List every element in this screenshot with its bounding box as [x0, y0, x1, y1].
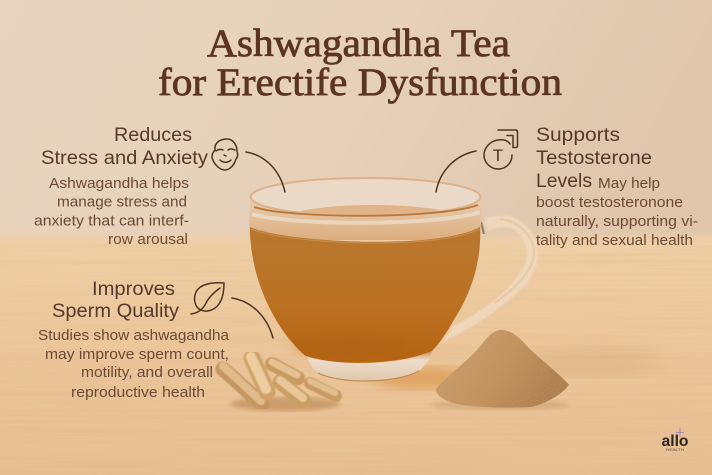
- shadows under cup and powder: [375, 348, 660, 410]
- connector arrow: [436, 151, 476, 192]
- icon: testosterone T symbol: [484, 130, 518, 169]
- connector arrow: [246, 152, 285, 192]
- body text: tality and sexual health: [536, 232, 693, 249]
- body text: may improve sperm count,: [45, 346, 229, 363]
- heading: Levels: [536, 171, 592, 192]
- rim interior: [252, 178, 478, 216]
- heading: Sperm Quality: [52, 301, 180, 322]
- logo: allo health: allo: [662, 433, 689, 450]
- glass rim: [250, 178, 480, 216]
- heading: [536, 125, 652, 192]
- callout: supports testosterone levels: [436, 125, 698, 249]
- heading: [41, 125, 209, 169]
- body text: May help: [598, 175, 660, 192]
- callout: improves sperm quality: [38, 279, 273, 401]
- heading: Stress and Anxiety: [41, 148, 209, 169]
- body text: [34, 175, 189, 248]
- icon: leaf: [191, 283, 224, 314]
- tea back surface through rim: [296, 205, 440, 216]
- callout: reduces stress and anxiety: [34, 125, 285, 248]
- cup foot: [306, 351, 432, 381]
- tea top band highlight: [251, 229, 479, 243]
- cup handle: [443, 216, 538, 342]
- body text: motility, and overall: [81, 364, 213, 381]
- connector arrow: [232, 298, 273, 338]
- body text: Ashwagandha helps: [49, 175, 189, 192]
- body text: [38, 327, 230, 401]
- background: wooden table: [0, 236, 712, 475]
- heading: Testosterone: [536, 148, 652, 169]
- tea inner glow: [290, 333, 410, 357]
- logo sparkle: [676, 428, 684, 437]
- body text: reproductive health: [71, 384, 205, 401]
- body text: [536, 175, 698, 249]
- body text: row arousal: [108, 231, 188, 248]
- icon: calm face: [212, 139, 238, 170]
- title: Ashwagandha Tea: [207, 22, 510, 65]
- body text: anxiety that can interf-: [34, 212, 189, 230]
- title: [158, 22, 562, 104]
- heading: Supports: [536, 125, 620, 146]
- heading: Improves: [92, 279, 175, 300]
- glass bowl upper: [249, 183, 481, 240]
- heading: [52, 279, 180, 322]
- title: for Erectife Dysfunction: [158, 61, 562, 104]
- body text: Studies show ashwagandha: [38, 327, 230, 344]
- background: wall: [0, 0, 712, 260]
- heading: Reduces: [114, 125, 192, 146]
- body text: naturally, supporting vi-: [536, 213, 698, 230]
- logo: allo health: HEALTH: [666, 448, 685, 452]
- icon: testosterone T symbol: T: [493, 146, 503, 165]
- tea cup: [249, 178, 538, 381]
- powder pile: [436, 330, 569, 408]
- body text: boost testosteronone: [536, 194, 683, 211]
- tea body: [250, 227, 480, 363]
- body text: manage stress and: [57, 194, 187, 210]
- root pieces: [223, 357, 336, 404]
- ashwagandha roots: [223, 357, 340, 411]
